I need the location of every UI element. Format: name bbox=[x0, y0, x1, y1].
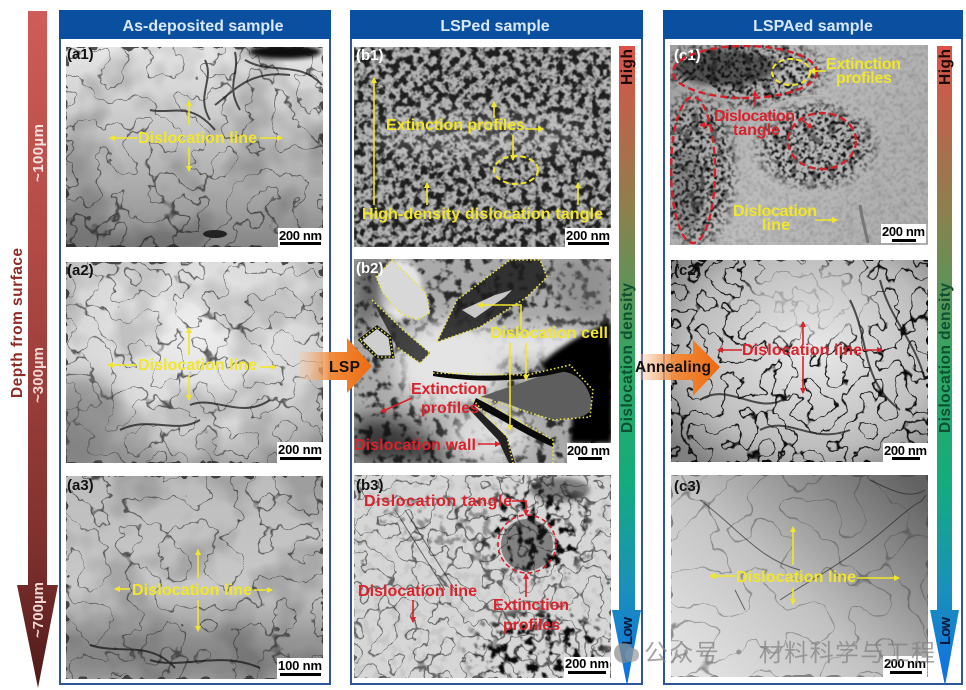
panel: LSPAed sample bbox=[663, 10, 963, 686]
depth mark 100: ~100µm bbox=[30, 124, 47, 182]
annotation b3: profiles bbox=[503, 617, 560, 634]
scale bar b3: 200 nm bbox=[565, 656, 609, 671]
annotation b2 red: Dislocation wall bbox=[354, 437, 476, 454]
scale bar a3: 100 nm bbox=[278, 658, 322, 673]
annotation b2 red bbox=[354, 381, 500, 454]
micrograph b2 bbox=[354, 259, 611, 463]
scale bar c2: 200 nm bbox=[884, 443, 927, 458]
annotation b1 bbox=[362, 78, 603, 223]
header: as-deposited: As-deposited sample bbox=[123, 18, 284, 35]
annotation b3 bbox=[358, 493, 569, 634]
density bar c bbox=[930, 46, 959, 686]
annotation c1 yellow: Extinction bbox=[826, 56, 901, 73]
annotation a2: Dislocation line bbox=[138, 357, 257, 374]
annotation b2 yellow: Dislocation cell bbox=[490, 325, 608, 342]
depth arrow bbox=[9, 11, 58, 688]
micrograph a1 bbox=[66, 45, 323, 247]
scale bar b2: 200 nm bbox=[567, 443, 610, 458]
depth label: Depth from surface bbox=[9, 248, 26, 398]
header: LSPed: LSPed sample bbox=[440, 18, 550, 35]
micrograph b1 bbox=[354, 47, 611, 247]
scale bar a2 bbox=[277, 442, 323, 463]
bar low c: Low bbox=[937, 617, 954, 645]
arrow: annealing: Annealing bbox=[635, 359, 711, 376]
annotation b1: High-density dislocation tangle bbox=[362, 206, 603, 223]
label b1: (b1) bbox=[356, 47, 384, 64]
annotation c2: Dislocation line bbox=[742, 342, 862, 359]
annotation c1 red: Dislocation bbox=[714, 108, 795, 125]
scale bar b3 bbox=[564, 656, 610, 678]
micrograph a3 bbox=[66, 476, 323, 679]
label c2: (c2) bbox=[674, 262, 701, 279]
annotation c1 yellow bbox=[733, 56, 901, 234]
bar high c: High bbox=[937, 49, 954, 85]
header: LSPed bbox=[350, 10, 643, 39]
panel: LSPed sample bbox=[350, 10, 643, 686]
micrograph c1 bbox=[670, 45, 928, 245]
annotation c1 red bbox=[671, 46, 856, 243]
density bar b bbox=[612, 46, 641, 686]
label a2: (a2) bbox=[67, 262, 94, 279]
bar title c: Dislocation density bbox=[937, 283, 954, 433]
scale bar c3 bbox=[883, 656, 927, 677]
arrow: LSP: LSP bbox=[329, 359, 360, 376]
annotation a3: Dislocation line bbox=[132, 582, 252, 599]
micrograph c3 bbox=[671, 475, 928, 677]
watermark: 公众号 · 材料科学与工程 bbox=[644, 633, 935, 668]
label c1: (c1) bbox=[674, 47, 701, 64]
scale bar c1: 200 nm bbox=[882, 224, 925, 239]
arrow: LSP bbox=[300, 338, 372, 393]
scale bar a2: 200 nm bbox=[278, 442, 322, 457]
label b2: (b2) bbox=[356, 260, 384, 277]
bar high b: High bbox=[619, 49, 636, 85]
label c3: (c3) bbox=[674, 478, 701, 495]
annotation c1 yellow: profiles bbox=[836, 70, 892, 87]
scale bar a1: 200 nm bbox=[279, 228, 322, 243]
label a1: (a1) bbox=[67, 46, 94, 63]
micrograph a2 bbox=[50, 262, 323, 465]
annotation c1 yellow: line bbox=[762, 217, 790, 234]
label b3: (b3) bbox=[356, 477, 384, 494]
scale bar c3: 200 nm bbox=[884, 656, 926, 671]
annotation b2 red: profiles bbox=[421, 400, 479, 417]
annotation b1: Extinction profiles bbox=[386, 117, 525, 134]
depth mark 700: ~700µm bbox=[30, 582, 47, 638]
annotation b2 red: Extinction bbox=[411, 381, 487, 398]
annotation b3: Extinction bbox=[493, 597, 569, 614]
scale bar b1: 200 nm bbox=[566, 228, 610, 243]
header: LSPAed: LSPAed sample bbox=[753, 18, 873, 35]
arrow: annealing bbox=[635, 340, 720, 396]
micrograph c2 bbox=[671, 260, 928, 462]
annotation b3: Dislocation tangle bbox=[364, 493, 512, 510]
annotation b2 yellow bbox=[478, 305, 608, 430]
scale bar a3 bbox=[277, 658, 323, 679]
header: as-deposited bbox=[59, 10, 331, 39]
micrograph b3 bbox=[354, 475, 611, 678]
depth mark 300: ~300µm bbox=[30, 347, 47, 403]
annotation a1: Dislocation line bbox=[138, 130, 257, 147]
annotation c3: Dislocation line bbox=[736, 569, 856, 586]
bar low b: Low bbox=[619, 617, 636, 645]
annotation c1 yellow: Dislocation bbox=[733, 203, 817, 220]
annotation c1 red: tangle bbox=[733, 122, 780, 139]
label a3: (a3) bbox=[67, 477, 94, 494]
annotation b3: Dislocation line bbox=[358, 583, 477, 600]
header: LSPAed bbox=[663, 10, 963, 39]
panel: as-deposited sample bbox=[50, 10, 331, 684]
bar title b: Dislocation density bbox=[619, 283, 636, 433]
